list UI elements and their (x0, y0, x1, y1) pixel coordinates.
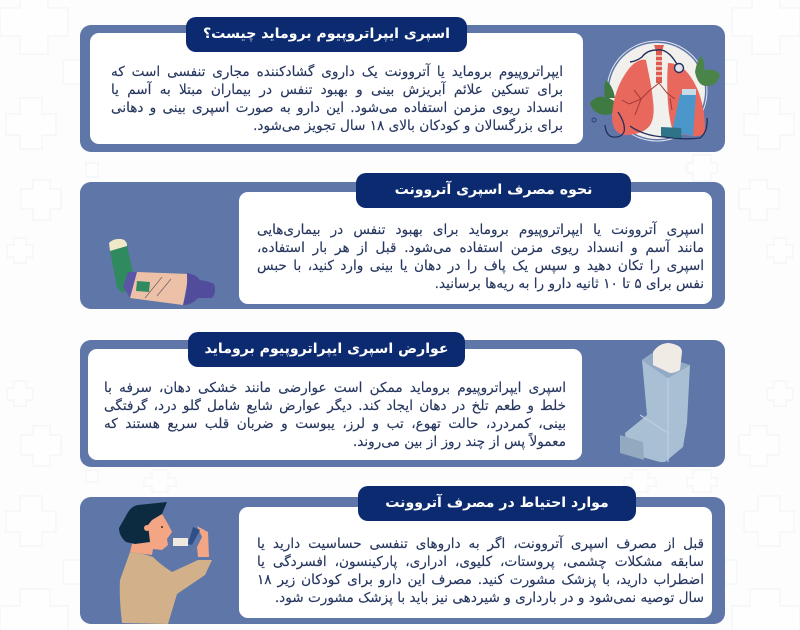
text box: precautions (239, 507, 712, 618)
text block: usage: اسپری را تکان دهید و سپس یک پاف را در دهان یا بینی وارد کنید، با حبس (257, 258, 704, 274)
heading: how to use: نحوه مصرف اسپری آتروونت (395, 182, 592, 198)
text block: precautions: سال توصیه نمی‌شود و در بارداری و شیردهی نیز باید با پزشک مشورت شود. (275, 590, 704, 606)
text block: precautions: قبل از مصرف اسپری آتروونت، اگر به داروهای تنفسی حساسیت دارید یا (257, 536, 704, 552)
text block: description: انسداد ریوی مزمن استفاده می‌شود. این دارو به صورت اسپری بینی و دهانی (111, 100, 563, 116)
text block: usage (257, 220, 704, 292)
text block: side effects: معمولاً پس از چند روز از بین می‌روند. (353, 434, 566, 450)
text block: usage: مانند آسم و انسداد ریوی مزمن استفاده می‌شود. قبل از هر بار استفاده، (257, 240, 704, 256)
text block: side effects (104, 380, 566, 450)
heading: how to use (356, 173, 631, 208)
heading: side effects: عوارض اسپری ایپراتروپیوم بروماید (204, 341, 448, 357)
text block: description (111, 62, 563, 134)
panel: what is ipratropium spray (80, 25, 725, 152)
text box: usage (239, 192, 712, 304)
text block: description: برای بزرگسالان و کودکان بالای ۱۸ سال تجویز می‌شود. (253, 118, 563, 134)
text block: precautions (257, 535, 704, 606)
text block: usage: نفس برای ۵ تا ۱۰ ثانیه دارو را به ریه‌ها برسانید. (435, 276, 704, 292)
text block: side effects: بینی، کمردرد، حالت تهوع، تب و لرز، یبوست و ضربان قلب سریع هستند که (104, 416, 566, 432)
text block: precautions: سابقه مشکلات چشمی، پروستات، کلیوی، ادراری، پارکینسون، افسردگی یا (257, 554, 704, 570)
text block: usage: اسپری آتروونت یا ایپراتروپیوم بروماید برای بهبود تنفس در بیماری‌هایی (257, 222, 704, 238)
panel: side effects (80, 340, 725, 467)
panel: how to use atrovent (80, 182, 725, 309)
text block: side effects: خلط و طعم تلخ در دهان ایجاد کند. دیگر عوارض شایع شامل گلو درد، گرفتگی (104, 398, 566, 414)
heading: what is ipratropium spray: اسپری ایپراتروپیوم بروماید چیست؟ (203, 26, 450, 42)
text block: description: برای تسکین علائم آبریزش بینی و بهبود تنفس در بیماران مبتلا به آسم یا (111, 82, 563, 98)
text box: description (90, 33, 583, 144)
heading: side effects (188, 332, 465, 367)
heading: what is ipratropium spray (186, 17, 467, 52)
text box: side effects (88, 349, 582, 460)
text block: description: ایپراتروپیوم بروماید یا آتروونت یک داروی گشادکننده مجاری تنفسی است که (111, 64, 563, 80)
text block: side effects: اسپری ایپراتروپیوم بروماید ممکن است عوارضی مانند خشکی دهان، سرفه با (104, 380, 566, 396)
heading: precautions: موارد احتیاط در مصرف آتروونت (385, 495, 609, 511)
text block: precautions: اضطراب دارید، با پزشک مشورت کنید. مصرف این دارو برای کودکان زیر ۱۸ (257, 572, 704, 588)
heading: precautions (358, 486, 636, 521)
panel: precautions (80, 497, 725, 624)
